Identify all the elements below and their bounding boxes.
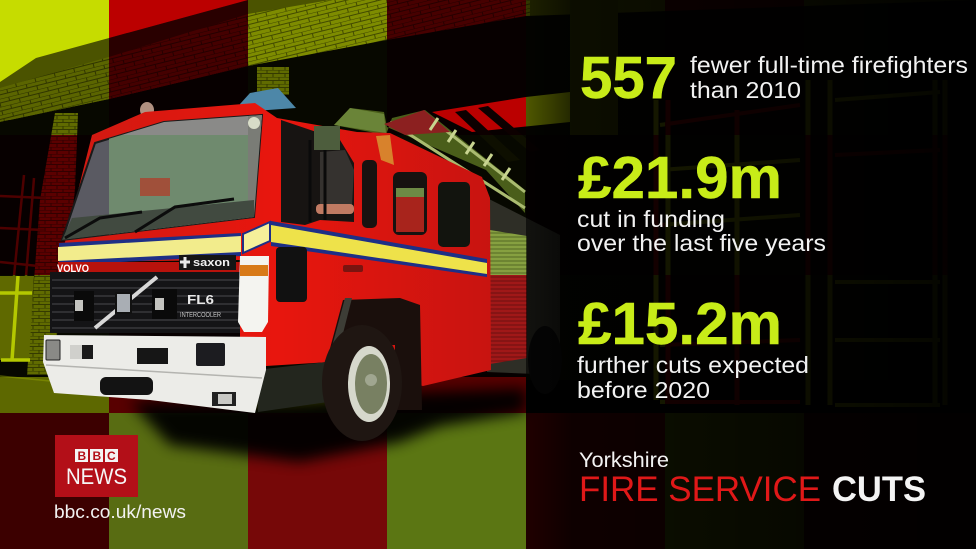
cab body xyxy=(60,103,491,386)
rear body xyxy=(487,198,560,375)
BBC News logo: C xyxy=(107,449,116,463)
station opening xyxy=(0,0,976,380)
small window xyxy=(362,160,377,228)
roof beacon xyxy=(140,102,154,118)
tyre xyxy=(322,325,402,441)
stat: 15.2m further cuts xyxy=(577,291,809,403)
stripe front xyxy=(59,233,241,265)
stripe side xyxy=(271,221,487,277)
right garage frames xyxy=(656,80,945,405)
FL6 badge: FL6 xyxy=(187,292,214,307)
ground line xyxy=(0,376,50,381)
green shutter xyxy=(490,230,527,275)
BBC News logo: NEWS xyxy=(66,464,127,489)
rear wheel xyxy=(528,326,562,394)
lower door window xyxy=(276,247,307,302)
dark overlay right xyxy=(526,0,976,549)
darker wall left sections xyxy=(0,57,109,122)
BBC News logo: B xyxy=(92,449,102,463)
ladder xyxy=(334,108,525,213)
stat: 557 fewer firefighters xyxy=(580,45,968,111)
title: CUTS xyxy=(832,470,926,509)
stat: 21.9m cut: £21.9m xyxy=(578,145,782,211)
bumper step xyxy=(256,362,328,412)
brick pillar right xyxy=(570,0,618,135)
cab door window xyxy=(281,120,354,225)
stat: 15.2m further cuts: £15.2m xyxy=(578,291,782,357)
FL6 badge xyxy=(180,292,221,319)
BBC News logo: B xyxy=(78,449,86,463)
BBC News logo xyxy=(55,435,138,497)
red shutter xyxy=(490,275,527,364)
stat: 21.9m cut: cut in funding xyxy=(577,206,725,232)
arch xyxy=(325,298,422,410)
tax disc xyxy=(248,117,260,129)
roof band xyxy=(0,0,976,90)
indicator pillar xyxy=(238,256,269,332)
blue roof light xyxy=(240,88,296,112)
brick wall xyxy=(0,0,530,122)
stat: 557 fewer firefighters: fewer full-time firefighters xyxy=(690,52,968,78)
fire engine xyxy=(43,88,562,441)
brick pillar left xyxy=(27,113,78,375)
ground shadow under engine xyxy=(130,388,526,462)
grille xyxy=(50,272,240,333)
windshield xyxy=(62,110,263,245)
garage door lower panel xyxy=(0,276,34,360)
station background xyxy=(0,0,976,413)
locker window xyxy=(393,172,427,235)
stat: 21.9m cut xyxy=(577,145,826,256)
wipers xyxy=(65,199,234,238)
stripe corner xyxy=(243,222,270,253)
title: FIRE SERVICE xyxy=(579,470,821,509)
brick pillar centre xyxy=(257,67,289,95)
VOLVO wordmark: VOLVO xyxy=(57,263,89,275)
ground upper xyxy=(0,377,526,413)
checkerboard colour tiles xyxy=(0,0,976,413)
front bumper xyxy=(43,335,266,413)
lower red front band xyxy=(58,262,240,274)
FL6 badge: INTERCOOLER xyxy=(180,312,221,319)
title xyxy=(579,449,926,509)
door handle xyxy=(343,265,363,272)
website url: bbc.co.uk/news xyxy=(54,502,186,522)
wing mirror xyxy=(310,126,340,222)
saxon badge xyxy=(179,255,236,270)
sky xyxy=(0,0,976,120)
garage door frames xyxy=(0,175,46,360)
stat: 557 fewer firefighters: than 2010 xyxy=(690,77,801,103)
roof panel highlight xyxy=(376,135,394,165)
stat: 21.9m cut: over the last five years xyxy=(577,230,826,256)
rear window xyxy=(438,182,470,247)
wheel hub xyxy=(348,346,390,422)
stat: 557 fewer firefighters: 557 xyxy=(580,45,677,111)
stat: 15.2m further cuts: before 2020 xyxy=(577,377,710,403)
stat: 15.2m further cuts: further cuts expected xyxy=(577,352,809,378)
driver xyxy=(320,150,354,205)
ceiling beams xyxy=(432,92,570,132)
title: Yorkshire xyxy=(579,449,669,472)
ground tiles bottom row xyxy=(0,413,976,549)
saxon badge: saxon xyxy=(193,257,230,269)
